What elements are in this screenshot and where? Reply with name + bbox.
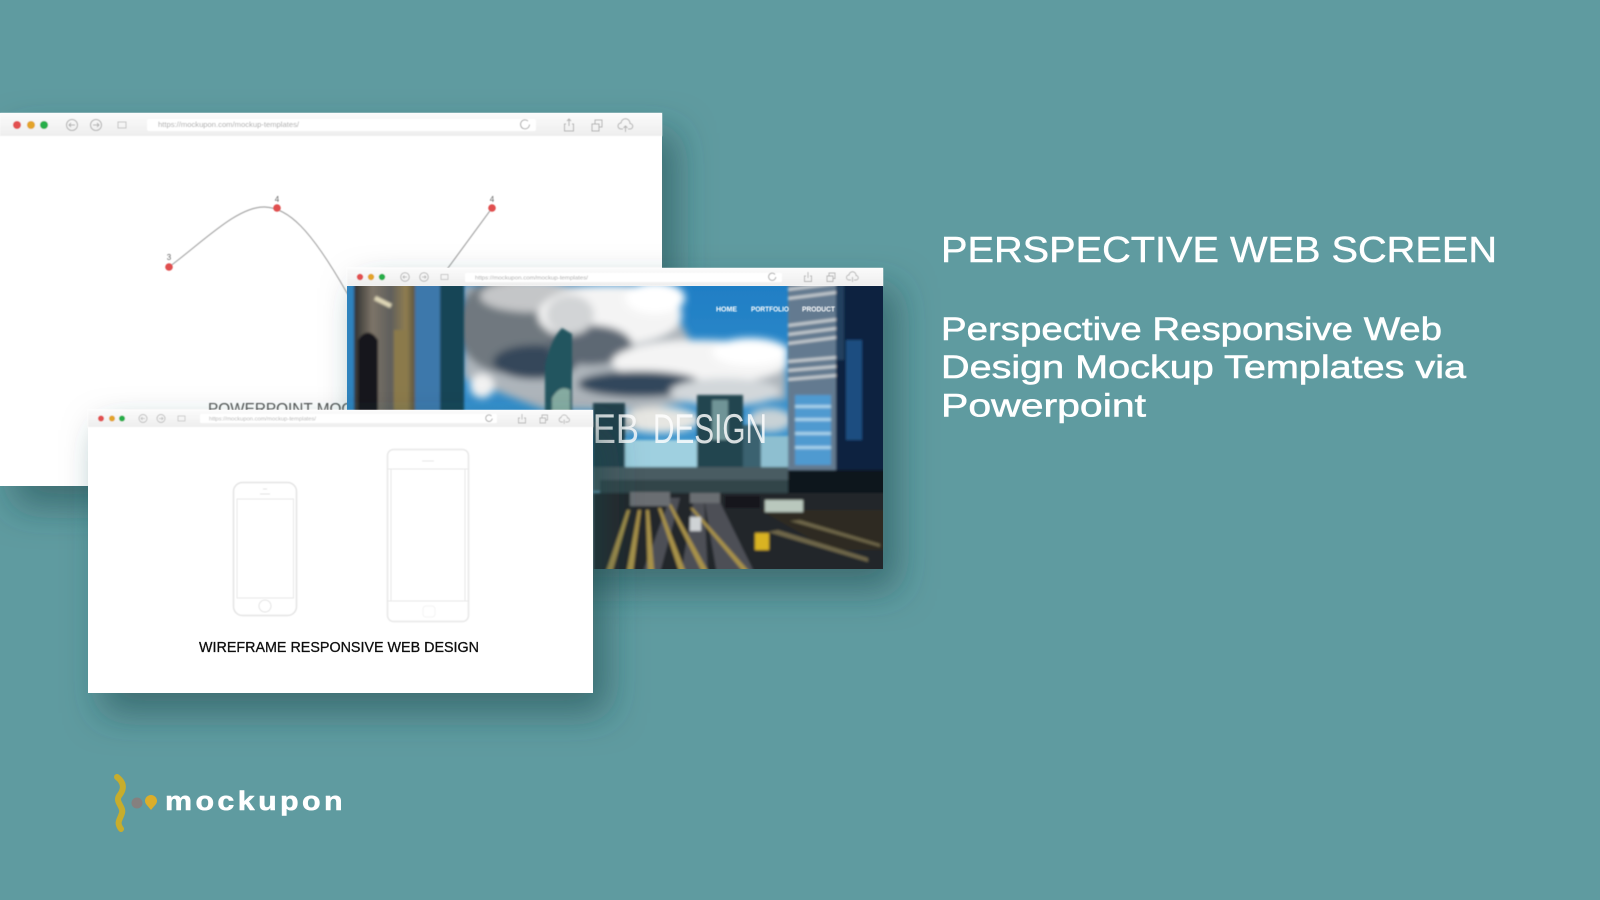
phone wireframe: small xyxy=(234,482,296,616)
window heading: POWERPOINT MOCKUP xyxy=(208,401,384,418)
hero heading: WEB xyxy=(560,405,639,452)
logo wordmark: mockupon xyxy=(165,786,346,816)
subtitle: Perspective Responsive Web xyxy=(941,311,1442,347)
line chart xyxy=(165,195,496,317)
subtitle: Design Mockup Templates via xyxy=(941,349,1466,385)
browser window: wireframe phones xyxy=(88,410,593,693)
site navigation: PORTFOLIO xyxy=(751,304,789,314)
line chart: 4 xyxy=(275,195,280,204)
site navigation xyxy=(716,304,835,314)
hero heading xyxy=(560,405,767,452)
browser window: line chart xyxy=(0,113,662,486)
site navigation: PRODUCT xyxy=(802,304,835,314)
browser toolbar xyxy=(0,113,662,136)
browser window: city photo website xyxy=(340,268,903,583)
browser toolbar: https://mockupon.com/mockup-templates/ xyxy=(209,416,316,422)
line chart: 3 xyxy=(167,253,172,262)
wireframe caption: WIREFRAME RESPONSIVE WEB DESIGN xyxy=(199,639,479,656)
subtitle xyxy=(941,311,1466,424)
logo mark xyxy=(117,777,157,829)
line chart: 4 xyxy=(490,195,495,204)
browser toolbar: https://mockupon.com/mockup-templates/ xyxy=(475,276,589,282)
title: PERSPECTIVE WEB SCREEN xyxy=(941,229,1497,270)
site navigation: HOME xyxy=(716,304,737,314)
browser toolbar: https://mockupon.com/mockup-templates/ xyxy=(158,122,299,129)
hero photo: city skyline xyxy=(347,286,883,569)
phone wireframe: large xyxy=(387,450,469,622)
hero heading: DESIGN xyxy=(653,405,767,452)
browser toolbar xyxy=(88,410,593,427)
subtitle: Powerpoint xyxy=(941,388,1146,424)
slide canvas xyxy=(0,112,1494,832)
browser toolbar xyxy=(347,268,883,286)
mockupon logo xyxy=(117,777,346,829)
